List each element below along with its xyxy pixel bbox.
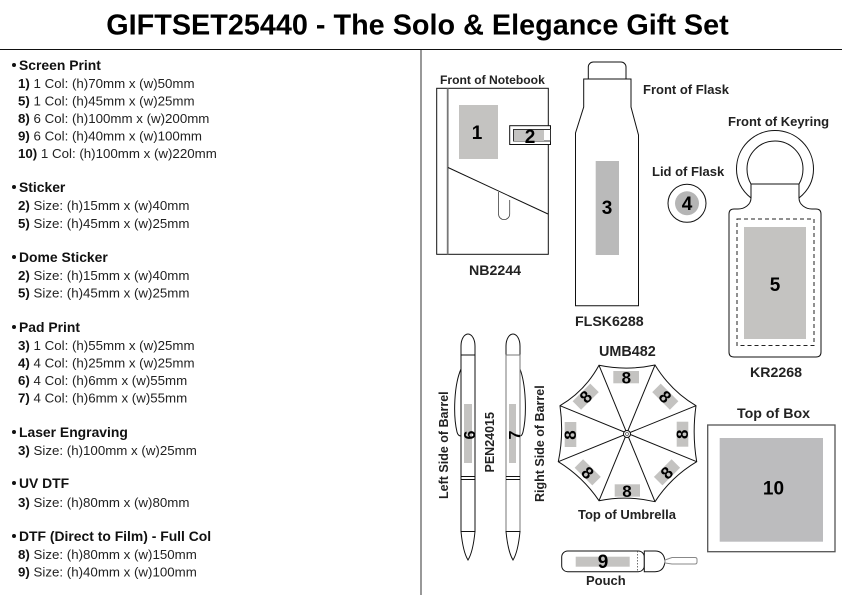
list: screen print: 1) 1 Col: (h)70mm x (w)50mm <box>18 76 195 91</box>
list: dtf full colour: 8) Size: (h)80mm x (w)150mm <box>18 547 197 562</box>
gift box: Top of Box <box>737 406 810 422</box>
pen labels: PEN24015 <box>483 412 497 472</box>
list: laser engraving <box>12 424 197 458</box>
umbrella: 8 <box>622 368 631 388</box>
umbrella: Top of Umbrella <box>578 507 677 522</box>
list: sticker: 5) Size: (h)45mm x (w)25mm <box>18 216 189 231</box>
flask: 3 <box>602 198 612 219</box>
pen labels <box>437 385 547 502</box>
list: dome sticker: Dome Sticker <box>19 249 108 265</box>
keyring: 5 <box>770 275 781 296</box>
list: uv dtf: 3) Size: (h)80mm x (w)80mm <box>18 495 189 510</box>
pen right: 7 <box>507 430 524 439</box>
list: uv dtf <box>12 475 189 510</box>
list: pad print <box>12 319 195 406</box>
gift box: 10 <box>763 478 784 500</box>
keyring <box>728 114 829 381</box>
list: laser engraving: Laser Engraving <box>19 424 128 440</box>
umbrella: 8 <box>673 430 692 439</box>
flask: FLSK6288 <box>575 314 644 330</box>
gift box <box>708 406 835 552</box>
flask lid <box>652 164 725 222</box>
pouch: 9 <box>598 552 608 573</box>
umbrella: 8 <box>655 387 675 407</box>
list: uv dtf: UV DTF <box>19 475 69 491</box>
umbrella: 8 <box>561 430 580 440</box>
list: pad print: 6) 4 Col: (h)6mm x (w)55mm <box>18 373 187 388</box>
title: GIFTSET25440 - The Solo & Elegance Gift Set <box>106 10 729 42</box>
pen right <box>506 334 525 560</box>
notebook <box>437 73 550 279</box>
flask lid: 4 <box>682 194 693 215</box>
umbrella: 8 <box>576 387 596 407</box>
keyring: KR2268 <box>750 365 802 381</box>
list: pad print: Pad Print <box>19 319 80 335</box>
flask <box>575 62 730 330</box>
notebook: 2 <box>525 127 535 148</box>
pen left <box>455 334 479 560</box>
notebook: 1 <box>472 123 483 144</box>
pouch: Pouch <box>586 573 626 588</box>
list: dome sticker <box>12 249 189 300</box>
list: laser engraving: 3) Size: (h)100mm x (w)25mm <box>18 443 197 458</box>
umbrella: 8 <box>577 463 597 483</box>
keyring: Front of Keyring <box>728 114 829 129</box>
list: dtf full colour: 9) Size: (h)40mm x (w)100mm <box>18 564 197 580</box>
list: screen print: Screen Print <box>19 57 101 73</box>
pen labels: Right Side of Barrel <box>533 385 547 502</box>
list: dtf full colour: DTF (Direct to Film) - Full Col <box>19 528 211 544</box>
pen labels: Left Side of Barrel <box>437 391 451 499</box>
list: sticker: 2) Size: (h)15mm x (w)40mm <box>18 198 189 213</box>
list: pad print: 3) 1 Col: (h)55mm x (w)25mm <box>18 338 195 353</box>
umbrella: 8 <box>622 482 632 501</box>
flask lid: Lid of Flask <box>652 164 725 179</box>
umbrella: 8 <box>657 463 677 483</box>
list: dtf full colour <box>12 528 211 580</box>
pouch <box>562 551 697 588</box>
notebook: Front of Notebook <box>440 73 545 87</box>
list: screen print: 8) 6 Col: (h)100mm x (w)200mm <box>18 111 209 126</box>
umbrella: UMB482 <box>599 344 656 360</box>
list: sticker <box>12 179 189 231</box>
list: screen print: 5) 1 Col: (h)45mm x (w)25mm <box>18 94 195 108</box>
pen left: 6 <box>462 430 479 439</box>
flask: Front of Flask <box>643 82 730 97</box>
umbrella <box>558 344 697 522</box>
list: screen print: 9) 6 Col: (h)40mm x (w)100mm <box>18 128 202 144</box>
list: dome sticker: 2) Size: (h)15mm x (w)40mm <box>18 268 189 283</box>
list: sticker: Sticker <box>19 179 66 195</box>
list: screen print: 10) 1 Col: (h)100mm x (w)220mm <box>18 146 217 161</box>
list: pad print: 4) 4 Col: (h)25mm x (w)25mm <box>18 356 195 370</box>
notebook: NB2244 <box>469 263 521 279</box>
list: pad print: 7) 4 Col: (h)6mm x (w)55mm <box>18 390 187 406</box>
list: screen print <box>12 57 217 161</box>
panel: print specifications <box>12 57 217 580</box>
list: dome sticker: 5) Size: (h)45mm x (w)25mm <box>18 286 189 300</box>
